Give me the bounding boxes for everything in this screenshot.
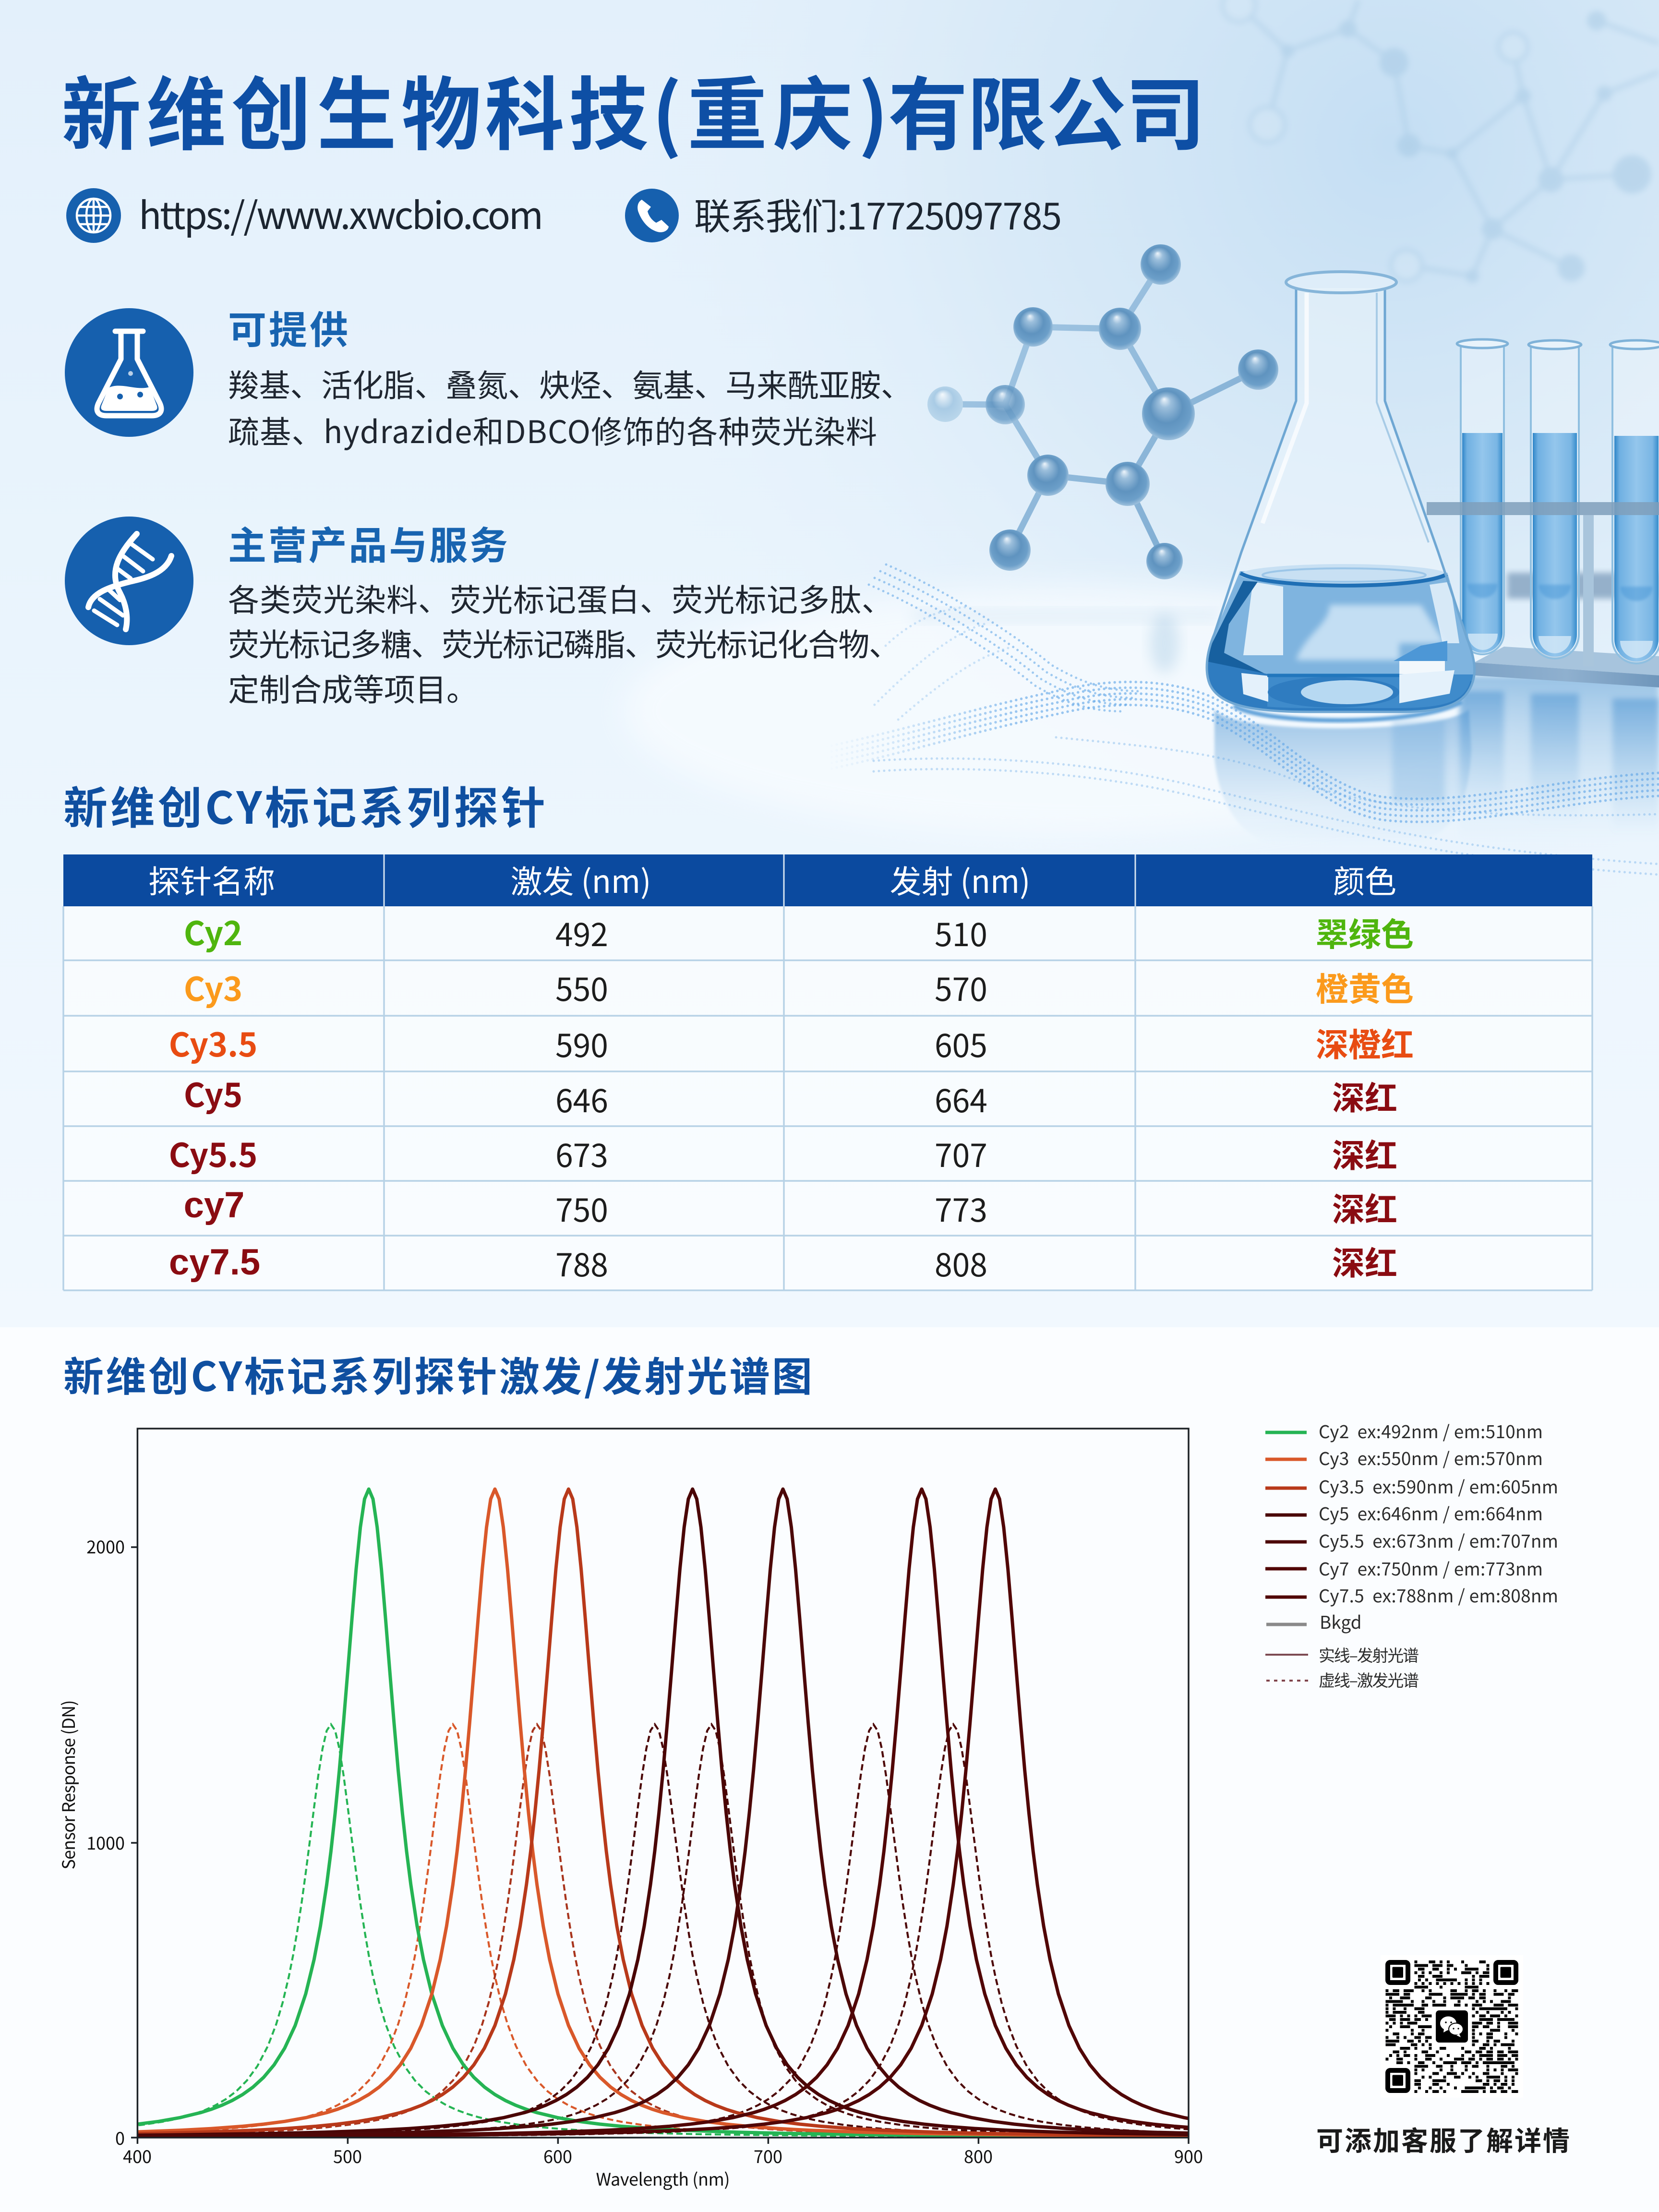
row Cy3: 橙黄色	[1316, 963, 1414, 1010]
tube 1	[1457, 339, 1508, 654]
excitation curves (dashed)	[138, 1722, 1188, 2137]
row Cy3.5: 590	[555, 1021, 608, 1067]
x axis labels: 600	[543, 2143, 572, 2168]
row cy7: 773	[935, 1185, 987, 1231]
liquid surface	[1240, 564, 1447, 586]
row Cy3.5: 605	[935, 1021, 987, 1067]
row Cy5: 深红	[1332, 1072, 1397, 1119]
legend: solid means emission: 实线–发射光谱	[1319, 1643, 1419, 1666]
row Cy5: 664	[935, 1076, 987, 1122]
row cy7: cy7	[184, 1185, 244, 1226]
x axis labels: 500	[333, 2143, 362, 2168]
x axis labels: 400	[123, 2143, 152, 2168]
legend: Cy3: Cy3 ex:550nm / em:570nm	[1319, 1444, 1543, 1470]
chart: excitation and emission spectra	[60, 1428, 1202, 2190]
legend: dashed means excitation: 虚线–激发光谱	[1319, 1668, 1419, 1691]
text: products and services: 荧光标记多糖、荧光标记磷脂、荧光标记化合物、	[228, 620, 900, 665]
row Cy5	[184, 1069, 1397, 1122]
section: available	[65, 300, 912, 452]
dotted wave ridge	[869, 565, 1142, 720]
legend: Cy3.5: Cy3.5 ex:590nm / em:605nm	[1319, 1473, 1558, 1499]
text: products and services: 各类荧光染料、荧光标记蛋白、荧光标记多肽、	[228, 575, 893, 620]
tube 3	[1610, 340, 1659, 663]
legend: Cy7.5: Cy7.5 ex:788nm / em:808nm	[1319, 1582, 1558, 1608]
table header: 探针名称	[148, 856, 275, 902]
x axis labels	[123, 2143, 1203, 2191]
heading: available: 可提供	[228, 300, 348, 355]
row Cy5: 646	[555, 1076, 608, 1122]
legend: Cy5: Cy5 ex:646nm / em:664nm	[1319, 1500, 1543, 1526]
QR code	[1381, 1955, 1523, 2098]
row cy7.5: 深红	[1332, 1237, 1397, 1285]
contact: phone: 联系我们:17725097785	[694, 187, 1062, 240]
heading: products and services: 主营产品与服务	[228, 515, 508, 571]
row Cy3: 570	[935, 964, 987, 1010]
table header: 激发 (nm)	[511, 856, 651, 902]
icon: globe	[66, 188, 121, 243]
row Cy3: 550	[555, 964, 608, 1010]
y axis labels	[55, 1534, 125, 2150]
y axis labels: Sensor Response (DN)	[55, 1700, 80, 1869]
flask liquid	[1208, 571, 1474, 710]
heading: probe table: 新维创CY标记系列探针	[63, 773, 545, 837]
x axis labels: 800	[964, 2143, 993, 2168]
text: available: 羧基、活化脂、叠氮、炔烃、氨基、马来酰亚胺、	[228, 361, 912, 406]
y axis labels: 2000	[86, 1534, 125, 1559]
heading: spectrum chart: 新维创CY标记系列探针激发/发射光谱图	[63, 1345, 812, 1403]
row Cy5.5: 深红	[1332, 1130, 1397, 1177]
text: products and services	[228, 575, 900, 710]
row Cy5.5	[169, 1129, 1397, 1177]
row Cy3.5: Cy3.5	[169, 1019, 257, 1066]
legend: background: Bkgd	[1320, 1608, 1362, 1634]
test tubes and rack	[1427, 339, 1659, 687]
row Cy5.5: 673	[555, 1130, 608, 1177]
erlenmeyer flask	[1200, 272, 1488, 715]
title: 新维创生物科技(重庆)有限公司	[61, 50, 1205, 166]
icon: DNA	[65, 517, 193, 645]
legend: Cy2: Cy2 ex:492nm / em:510nm	[1319, 1418, 1543, 1443]
row Cy2: Cy2	[184, 907, 242, 955]
icon: flask	[65, 308, 193, 437]
x axis labels: 700	[754, 2143, 782, 2168]
legend: Cy5.5: Cy5.5 ex:673nm / em:707nm	[1319, 1527, 1558, 1553]
ball-and-stick molecule	[927, 244, 1278, 579]
dotted wave faint lower strands	[874, 737, 1659, 875]
chart frame and ticks	[131, 1429, 1189, 2144]
row cy7: 深红	[1332, 1183, 1397, 1231]
row Cy3.5: 深橙红	[1316, 1019, 1414, 1066]
QR caption: 可添加客服了解详情	[1316, 2120, 1570, 2159]
row Cy3.5	[169, 1019, 1414, 1067]
text: products and services: 定制合成等项目。	[228, 665, 478, 710]
row Cy2	[184, 907, 1414, 956]
icon: phone	[625, 189, 679, 242]
row Cy2: 翠绿色	[1316, 908, 1414, 956]
row cy7.5	[169, 1237, 1397, 1286]
contact: website: https://www.xwcbio.com	[139, 186, 543, 240]
text: available: 疏基、hydrazide和DBCO修饰的各种荧光染料	[228, 407, 877, 452]
chart legend	[1265, 1418, 1558, 1691]
icon: WeChat	[1436, 2010, 1468, 2043]
row Cy3: Cy3	[184, 963, 242, 1010]
blurred background molecule network	[1223, 0, 1659, 283]
emission curves (solid)	[138, 1487, 1188, 2137]
table header: 发射 (nm)	[890, 856, 1030, 902]
row cy7	[184, 1183, 1397, 1231]
row Cy5: Cy5	[184, 1069, 242, 1117]
row Cy5.5: 707	[935, 1130, 987, 1177]
y axis labels: 1000	[86, 1830, 125, 1855]
text: available	[228, 361, 912, 452]
row Cy5.5: Cy5.5	[169, 1129, 257, 1177]
table header: 颜色	[1333, 856, 1396, 902]
table header	[148, 856, 1396, 902]
dotted data wave	[816, 682, 1659, 822]
row Cy2: 510	[935, 910, 987, 956]
x axis labels: 900	[1174, 2143, 1203, 2168]
row Cy2: 492	[555, 910, 608, 956]
y axis labels: 0	[115, 2125, 125, 2150]
legend: Cy7: Cy7 ex:750nm / em:773nm	[1319, 1555, 1543, 1581]
row cy7.5: 788	[555, 1240, 608, 1286]
tube 2	[1528, 340, 1581, 659]
x axis labels: Wavelength (nm)	[596, 2166, 730, 2191]
section: products and services	[65, 515, 900, 710]
row Cy3	[184, 963, 1414, 1010]
row cy7.5: cy7.5	[169, 1242, 260, 1283]
table: probes	[63, 854, 1592, 1290]
row cy7: 750	[555, 1185, 608, 1231]
row cy7.5: 808	[935, 1240, 987, 1286]
table surface glow and reflections	[624, 586, 1659, 845]
